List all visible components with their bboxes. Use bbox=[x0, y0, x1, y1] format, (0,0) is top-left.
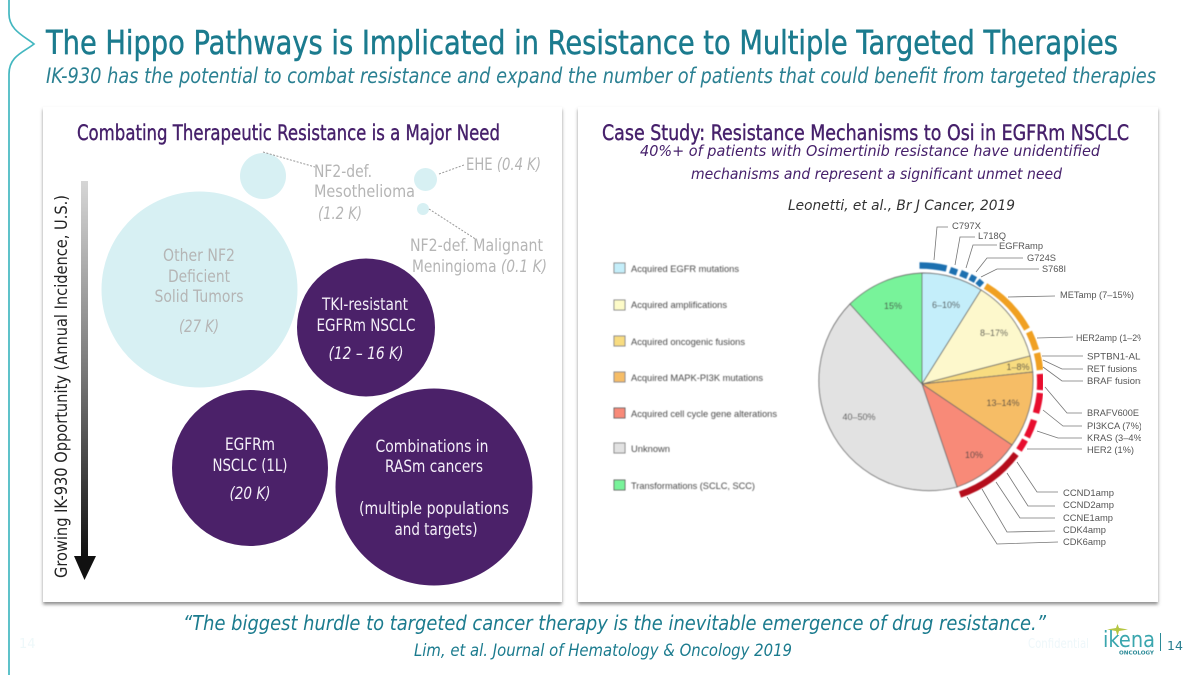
bubble: NF2-def. malignant meningioma: NF2-def. Malignant bbox=[410, 236, 543, 255]
bubble: EGFRm NSCLC 1L: NSCLC (1L) bbox=[212, 456, 288, 475]
panel: combating therapeutic resistance bbox=[43, 107, 562, 602]
outer arcs: mutation groups bbox=[920, 265, 1040, 494]
bubble: EHE: EHE (0.4 K) bbox=[466, 155, 541, 174]
mutation labels with leader lines: C797X bbox=[952, 221, 982, 232]
bubble: combinations in RASm cancers: (multiple populations bbox=[359, 499, 509, 518]
case study callout bbox=[640, 142, 1100, 183]
bubble: NF2-def. mesothelioma: Mesothelioma bbox=[314, 182, 415, 201]
bubble: TKI-resistant EGFRm NSCLC: TKI-resistant bbox=[321, 295, 408, 314]
legend: Acquired oncogenic fusions bbox=[631, 337, 745, 348]
mutation labels with leader lines: CCND1amp bbox=[1063, 488, 1114, 499]
arrow: growing opportunity bbox=[74, 181, 96, 580]
logo: ikena oncology: ikena bbox=[1103, 628, 1155, 653]
logo: ikena oncology: ONCOLOGY bbox=[1119, 650, 1155, 656]
bubble: combinations in RASm cancers: RASm cancers bbox=[385, 457, 483, 476]
panel heading: Combating Therapeutic Resistance is a Major Need bbox=[77, 121, 500, 145]
mutation labels with leader lines: CCND2amp bbox=[1063, 500, 1114, 511]
mutation labels with leader lines: KRAS (3–4%) bbox=[1087, 433, 1145, 444]
pie chart: resistance mechanisms: 15% bbox=[884, 301, 902, 311]
panel background bbox=[578, 107, 1158, 602]
bubble: TKI-resistant EGFRm NSCLC: EGFRm NSCLC bbox=[316, 316, 416, 335]
mutation labels with leader lines: HER2amp (1–2%) bbox=[1076, 333, 1148, 344]
citation: Leonetti, et al., Br J Cancer, 2019 bbox=[788, 198, 1015, 214]
legend: Acquired MAPK-PI3K mutations bbox=[631, 373, 763, 384]
legend: Acquired amplifications bbox=[631, 300, 727, 311]
mutation labels with leader lines: RET fusions bbox=[1087, 364, 1137, 375]
bubble: NF2-def. mesothelioma: (1.2 K) bbox=[318, 204, 362, 223]
pie chart: resistance mechanisms: 1–8% bbox=[1006, 362, 1030, 372]
bubble: EHE bbox=[414, 155, 541, 191]
pie chart: resistance mechanisms: 13–14% bbox=[986, 398, 1020, 408]
legend: Transformations (SCLC, SCC) bbox=[631, 481, 755, 492]
bubble: other NF2 deficient solid tumors bbox=[102, 192, 298, 388]
mutation labels with leader lines: BRAF fusions bbox=[1087, 376, 1145, 387]
mutation labels with leader lines: SPTBN1-ALK bbox=[1087, 352, 1148, 362]
mutation labels with leader lines: METamp (7–15%) bbox=[1060, 290, 1134, 301]
case study callout: 40%+ of patients with Osimertinib resistance have unidentified bbox=[640, 142, 1100, 160]
bubble: other NF2 deficient solid tumors: Deficient bbox=[168, 267, 230, 286]
legend bbox=[614, 263, 777, 492]
mutation labels with leader lines: CDK6amp bbox=[1063, 537, 1106, 548]
pie chart: resistance mechanisms: 40–50% bbox=[842, 412, 876, 422]
quote: “The biggest hurdle to targeted cancer therapy is the inevitable emergence of drug resistance.” bbox=[183, 611, 1046, 635]
bubble: NF2-def. mesothelioma: NF2-def. bbox=[314, 162, 372, 181]
faint page number: 14 bbox=[19, 637, 36, 652]
pie chart: resistance mechanisms: 8–17% bbox=[980, 328, 1008, 338]
bubble: EGFRm NSCLC 1L: EGFRm bbox=[225, 435, 275, 454]
bubble: NF2-def. malignant meningioma bbox=[410, 203, 547, 276]
mutation labels with leader lines: S768I bbox=[1042, 264, 1066, 275]
pie chart: resistance mechanisms: 6–10% bbox=[932, 300, 960, 310]
mutation labels with leader lines: PI3KCA (7%) bbox=[1087, 421, 1142, 432]
mutation labels with leader lines: BRAFV600E bbox=[1087, 408, 1139, 419]
page number: 14 bbox=[1167, 638, 1183, 653]
legend: Acquired cell cycle gene alterations bbox=[631, 409, 777, 420]
bubble: TKI-resistant EGFRm NSCLC: (12 – 16 K) bbox=[328, 344, 404, 363]
bubble: combinations in RASm cancers: Combinations in bbox=[376, 437, 488, 456]
mutation labels with leader lines: HER2 (1%) bbox=[1087, 445, 1134, 456]
bubble: combinations in RASm cancers bbox=[336, 388, 532, 586]
logo: ikena oncology bbox=[1103, 624, 1155, 656]
mutation labels with leader lines: CCNE1amp bbox=[1063, 513, 1113, 524]
logo divider bbox=[1160, 633, 1161, 651]
case study callout: mechanisms and represent a significant unmet need bbox=[691, 165, 1062, 183]
bubble: EGFRm NSCLC 1L bbox=[172, 390, 328, 546]
pie chart: resistance mechanisms bbox=[819, 273, 1033, 491]
bubble: TKI-resistant EGFRm NSCLC bbox=[297, 258, 435, 396]
bubble: other NF2 deficient solid tumors: Other NF2 bbox=[163, 246, 235, 265]
bubble: combinations in RASm cancers: and targets) bbox=[394, 520, 478, 539]
axis label: Growing IK-930 Opportunity (Annual Incidence, U.S.) bbox=[52, 195, 72, 578]
mutation labels with leader lines: G724S bbox=[1027, 253, 1056, 264]
bubble: NF2-def. mesothelioma bbox=[240, 152, 415, 223]
quote source: Lim, et al. Journal of Hematology & Oncology 2019 bbox=[414, 641, 792, 660]
mutation labels with leader lines: CDK4amp bbox=[1063, 525, 1106, 536]
bubble: other NF2 deficient solid tumors: (27 K) bbox=[179, 317, 219, 336]
bubble: EGFRm NSCLC 1L: (20 K) bbox=[230, 484, 270, 503]
panel background bbox=[43, 107, 562, 602]
mutation labels with leader lines: EGFRamp bbox=[999, 241, 1043, 252]
panel: case study bbox=[578, 107, 1158, 602]
mutation labels with leader lines: L718Q bbox=[978, 231, 1006, 242]
bubble: other NF2 deficient solid tumors: Solid Tumors bbox=[154, 287, 244, 306]
icon: logo star bbox=[1107, 624, 1128, 636]
legend: Unknown bbox=[631, 444, 670, 455]
pie chart: resistance mechanisms: 10% bbox=[965, 450, 983, 460]
mutation labels with leader lines bbox=[934, 221, 1148, 548]
legend: Acquired EGFR mutations bbox=[631, 264, 739, 275]
bubble: NF2-def. malignant meningioma: Meningioma (0.1 K) bbox=[412, 257, 547, 276]
bracket line bbox=[9, 0, 34, 675]
faint confidential label: Confidential bbox=[1028, 637, 1089, 652]
